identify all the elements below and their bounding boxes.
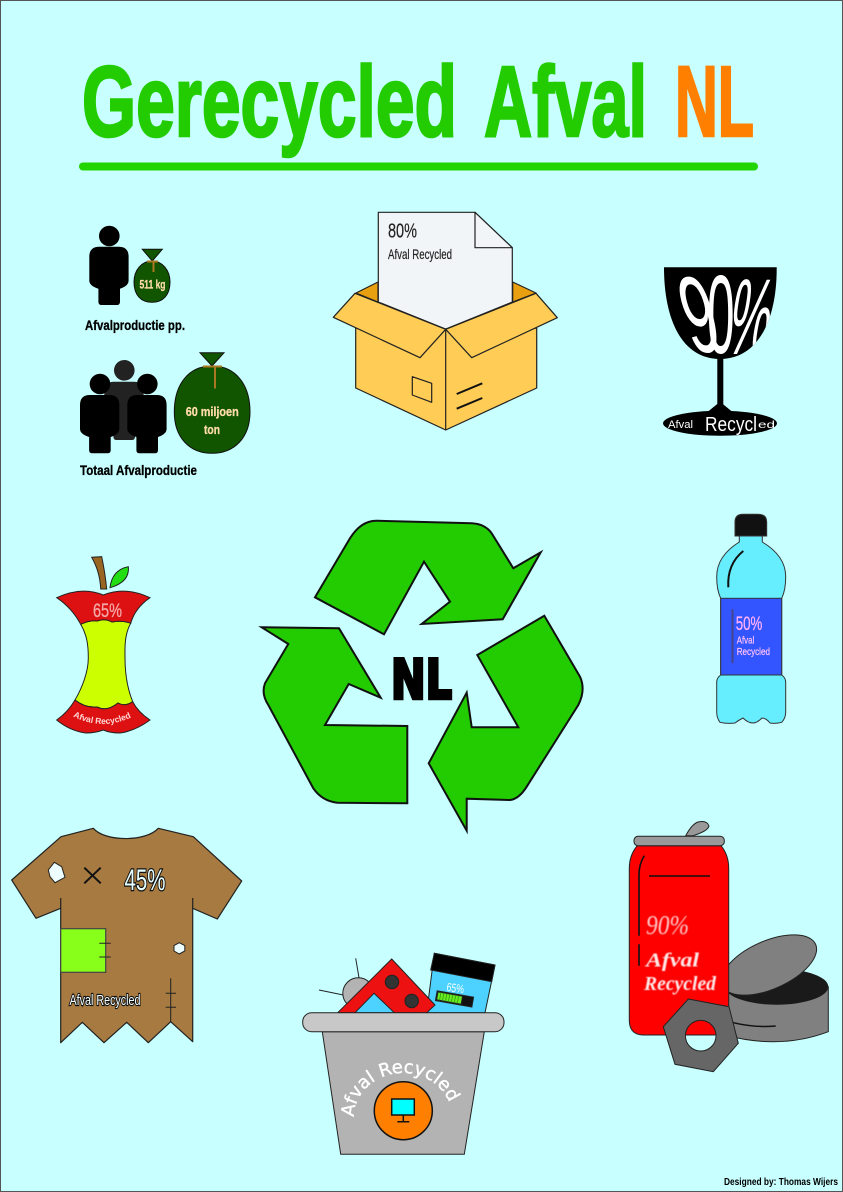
tin groove bbox=[732, 1022, 776, 1027]
tin body bbox=[725, 987, 828, 1042]
red can bbox=[629, 846, 729, 1035]
percentage in bowl: 9 bbox=[666, 254, 731, 375]
box label bbox=[412, 377, 432, 402]
hex nut bbox=[663, 999, 738, 1072]
box flaps bbox=[333, 293, 557, 358]
percentage in bowl bbox=[680, 275, 770, 354]
tin interior bbox=[725, 969, 828, 1005]
curved caption: Afval Recycled bbox=[341, 1062, 461, 1117]
paper sheet bbox=[378, 212, 512, 329]
orange badge bbox=[374, 1082, 432, 1140]
shirt shape bbox=[12, 828, 242, 1043]
bottle body bbox=[717, 536, 786, 723]
panel: plastic bottle bbox=[717, 514, 786, 723]
panel: apple core bbox=[56, 556, 151, 734]
bottle cap bbox=[735, 514, 767, 536]
icon: large waste bag bbox=[174, 353, 250, 453]
lower skin bbox=[57, 700, 150, 733]
bag unit: ton bbox=[204, 423, 220, 437]
can highlights bbox=[639, 856, 710, 966]
pull tab bbox=[686, 822, 709, 836]
glass caption: Afval bbox=[668, 419, 693, 431]
bottle label bbox=[721, 598, 782, 675]
caption: Afval Recycled bbox=[70, 992, 140, 1009]
center label: NL bbox=[391, 648, 452, 712]
percentage in bowl: % bbox=[721, 256, 783, 377]
percentage: 65% bbox=[93, 601, 122, 622]
toy house bbox=[338, 959, 435, 1013]
tin lid bbox=[713, 922, 825, 1008]
icon: monitor bbox=[392, 1099, 414, 1122]
icon: group of people bbox=[80, 360, 167, 453]
title: NL bbox=[675, 46, 754, 158]
stem bbox=[92, 557, 107, 589]
upper skin bbox=[57, 591, 150, 624]
caption: Afval Recycled bbox=[73, 712, 131, 726]
top arrow bbox=[315, 521, 541, 634]
phone: 65% bbox=[446, 980, 465, 996]
bag value: 60 miljoen bbox=[186, 405, 239, 419]
patch bbox=[61, 929, 106, 972]
panel: e-waste bin bbox=[302, 952, 504, 1155]
label: Totaal Afvalproductie bbox=[80, 462, 197, 478]
right arrow bbox=[429, 616, 583, 831]
percentage: 90% bbox=[646, 910, 689, 940]
glass caption: Recycl bbox=[705, 414, 757, 436]
phone bbox=[427, 953, 495, 1013]
panel: wine glass bbox=[663, 267, 777, 436]
title underline bbox=[79, 162, 758, 170]
left arrow bbox=[262, 627, 407, 803]
stitches bbox=[99, 943, 176, 1022]
box inside bbox=[356, 282, 536, 302]
panel: waste production per person bbox=[85, 226, 185, 333]
title: Afval bbox=[484, 46, 647, 158]
bag value: 511 kg bbox=[140, 278, 166, 292]
panel: paper in cardboard box bbox=[333, 212, 557, 430]
label: Afvalproductie pp. bbox=[85, 318, 185, 333]
title: Gerecycled bbox=[82, 46, 457, 158]
leaf bbox=[110, 567, 128, 588]
panel: cans bbox=[629, 822, 828, 1072]
bin body bbox=[322, 1032, 484, 1154]
caption: Recycled bbox=[737, 646, 770, 658]
core bbox=[75, 620, 133, 709]
percentage: 45% bbox=[124, 864, 166, 897]
cross mark bbox=[84, 868, 101, 883]
holes bbox=[48, 862, 65, 883]
percentage: 80% bbox=[388, 220, 417, 242]
box body bbox=[356, 328, 537, 430]
caption: Afval Recycled bbox=[388, 246, 452, 262]
glass caption: ed bbox=[758, 420, 775, 431]
icon: small waste bag bbox=[134, 249, 170, 302]
icon: person bbox=[89, 226, 129, 305]
can rim bbox=[634, 836, 724, 846]
recycling symbol bbox=[262, 521, 583, 831]
percentage in bowl: 0 bbox=[707, 254, 735, 378]
bin rim bbox=[303, 1013, 504, 1032]
caption: Afval bbox=[737, 634, 754, 646]
highlight bbox=[728, 551, 743, 587]
mouse bbox=[319, 958, 374, 1009]
percentage: 50% bbox=[736, 614, 762, 635]
caption: Recycled bbox=[643, 973, 717, 995]
glass shape bbox=[663, 267, 777, 436]
panel: total waste production bbox=[80, 353, 250, 478]
caption: Afval bbox=[644, 950, 700, 972]
panel: t-shirt bbox=[12, 828, 242, 1043]
